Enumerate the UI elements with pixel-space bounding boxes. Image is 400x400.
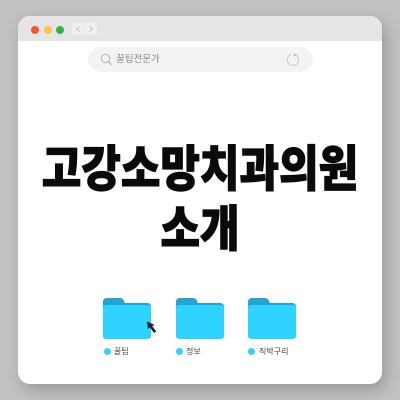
icon: magnifier bbox=[100, 54, 112, 66]
folder: 정보 bbox=[176, 298, 224, 339]
folder: 직박구리 bbox=[248, 298, 296, 339]
label: 꿀팁 bbox=[104, 347, 129, 356]
window controls bbox=[31, 26, 64, 34]
label: 정보 bbox=[176, 347, 201, 356]
title bar bbox=[18, 16, 382, 41]
title line 2: 소개 bbox=[160, 203, 240, 257]
icon: cursor bbox=[147, 322, 156, 333]
navigation buttons bbox=[72, 23, 97, 35]
folder: 꿀팁 bbox=[103, 298, 151, 339]
label: 정보: 정보 bbox=[186, 347, 201, 356]
title line 1: 고강소망치과의원 bbox=[42, 143, 358, 197]
label: 꿀팁: 꿀팁 bbox=[114, 347, 129, 356]
title bbox=[42, 143, 358, 257]
search bar bbox=[88, 47, 313, 72]
label: 직박구리: 직박구리 bbox=[259, 347, 288, 356]
search text: 꿀팁전문가 bbox=[116, 54, 160, 65]
icon: reload bbox=[286, 54, 300, 66]
